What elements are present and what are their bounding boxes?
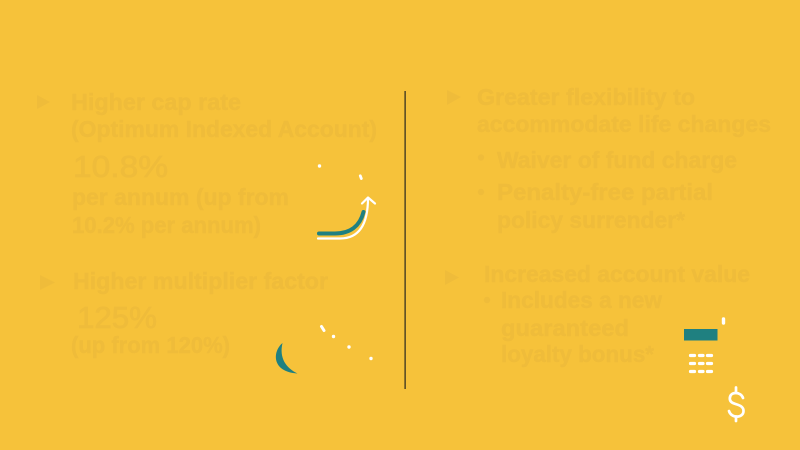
icon: bullet dot waiver xyxy=(478,154,484,161)
text: per annum up from: per annum (up from xyxy=(72,184,289,210)
icon: bullet triangle account value xyxy=(445,270,459,285)
text: policy surrender: policy surrender* xyxy=(497,207,685,233)
heading: higher cap rate: Higher cap rate xyxy=(71,89,241,115)
heading: optimum indexed account: (Optimum Indexed Account) xyxy=(71,116,377,142)
text: includes a new: Includes a new xyxy=(501,287,662,313)
icon: crescent and dots xyxy=(276,326,373,374)
text: 10.2% per annum: 10.2% per annum) xyxy=(72,212,261,238)
text: guaranteed: guaranteed xyxy=(501,315,629,341)
icon: bullet triangle multiplier xyxy=(40,275,55,290)
panel: higher cap rate xyxy=(37,89,377,238)
stat: 125%: 125% xyxy=(77,300,157,335)
icon: bullet dot penalty xyxy=(478,189,484,195)
panel: higher multiplier factor xyxy=(40,268,328,358)
stat: 10.8%: 10.8% xyxy=(73,149,168,184)
icon: dollar sign xyxy=(729,388,744,421)
icon: rising arrow xyxy=(318,164,375,238)
icon: bullet triangle flexibility xyxy=(447,90,461,105)
icon: bullet triangle cap rate xyxy=(37,95,50,109)
heading: greater flexibility: Greater flexibility to xyxy=(477,84,695,110)
text: penalty-free partial: Penalty-free partial xyxy=(497,179,713,205)
text: waiver of fund charge: Waiver of fund charge xyxy=(497,147,737,173)
icon: calculator xyxy=(684,319,724,372)
text: loyalty bonus: loyalty bonus* xyxy=(501,341,654,367)
divider xyxy=(404,91,406,389)
icon: bullet dot includes xyxy=(484,297,490,303)
panel: increased account value xyxy=(445,261,750,367)
heading: increased account value: Increased account value xyxy=(484,261,750,287)
heading: accommodate life changes: accommodate life changes xyxy=(477,111,771,137)
text: up from 120%: (up from 120%) xyxy=(71,332,230,358)
heading: higher multiplier factor: Higher multiplier factor xyxy=(73,268,328,294)
panel: greater flexibility xyxy=(447,84,771,233)
